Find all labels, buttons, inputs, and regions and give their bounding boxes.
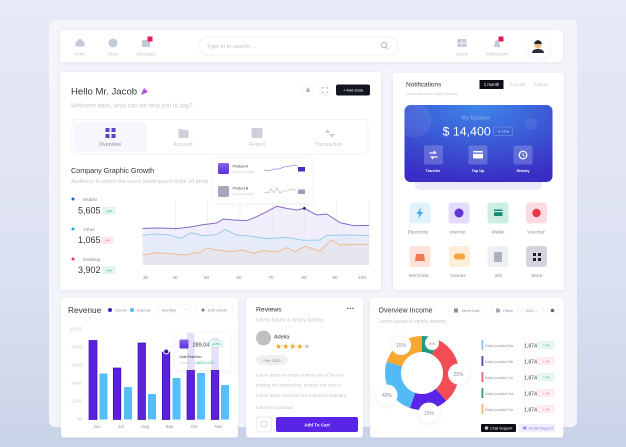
stat: desktop: Desktop [83, 257, 101, 263]
tab: transaction [315, 129, 342, 148]
area line chart [143, 200, 369, 281]
search box [199, 37, 398, 55]
data tooltip: +8.5% [212, 342, 221, 346]
legend: Income [115, 308, 127, 312]
button: email support: Email Support [529, 426, 554, 430]
stat: other: -3% [104, 238, 110, 242]
bar chart: 4,000 [72, 380, 83, 386]
legend: product ee [482, 404, 554, 414]
dashboard frame [49, 20, 577, 427]
date pill: Feb 2020 [264, 358, 281, 363]
tab bar [72, 120, 368, 154]
button: add data: + Add Data [343, 88, 364, 92]
stat: other: 1,065 [78, 235, 101, 245]
legend: product bb: ↙ 2% [542, 360, 550, 364]
action: top up [468, 146, 488, 173]
service: games [449, 246, 470, 279]
service: more: More [532, 273, 543, 279]
heading: revenue: Revenue [68, 305, 102, 315]
period selector: Custom [534, 82, 549, 87]
heading: company growth: Company Graphic Growth [71, 166, 154, 175]
bar chart: Sep [165, 424, 174, 429]
bar chart: Nov [214, 424, 223, 429]
bar chart: 10,000 [69, 326, 83, 332]
bubble: 40%: 40% [382, 393, 393, 399]
area line chart: 30 [143, 275, 148, 281]
bubble: 15% top: 15% [396, 343, 407, 349]
service: bill [488, 246, 508, 279]
tab: overview [74, 122, 147, 152]
stat: other: Other [83, 227, 95, 233]
service: merchant: Merchant [408, 273, 429, 279]
service: voucher [526, 202, 547, 236]
tooltip: products [213, 158, 312, 203]
nav: layout: Layout [456, 52, 469, 56]
stat: desktop: +8% [106, 268, 112, 272]
service: bill: Bill [495, 273, 502, 279]
tab: account: Account [173, 142, 193, 148]
subtitle: Welcome back, what can we help you to day? [71, 104, 193, 110]
control: year: 2020 ⌄ [526, 309, 538, 313]
control: filters: Filters [503, 309, 513, 313]
legend: product ee: ↙ 2% [542, 408, 550, 412]
control: edit charts: Edit charts [208, 308, 227, 312]
nav: messages [136, 36, 156, 56]
bar chart: 8,000 [72, 344, 83, 350]
search box: Type in to search ... [207, 44, 256, 50]
area line chart: 40 [172, 275, 178, 281]
bar chart [69, 326, 232, 429]
bar chart: 2,000 [72, 398, 83, 404]
data tooltip: Data Retention [180, 355, 202, 359]
star rating: ★★★★★ [275, 342, 310, 351]
data tooltip: 289,04 [192, 342, 209, 348]
overview subtitle: Lorem Ipsum is simply dummy [378, 319, 447, 325]
nav: messages: Messages [136, 52, 156, 56]
period selector: 1 month [484, 82, 500, 87]
nav: chart: Chart [108, 52, 119, 56]
heading: hello: Hello Mr. Jacob [71, 86, 137, 98]
legend: product aa: Data product Aa [485, 343, 514, 348]
area line chart: 100 [358, 275, 366, 281]
review text: Lorem Ipsum is simply dummy text of the rice [256, 372, 345, 378]
legend: product cc: 1,874 [524, 376, 537, 382]
nav: notifications [486, 36, 508, 56]
heading: overview income: Overview Income [378, 308, 433, 314]
nav: home: Home [74, 52, 86, 56]
bar chart: Oct [190, 424, 198, 429]
bar chart: $0 [77, 416, 83, 422]
action: history [514, 146, 532, 173]
area line chart: 60 [236, 275, 242, 281]
legend: product bb [482, 356, 554, 366]
button: chat support: Chat Support [490, 426, 513, 430]
legend: product dd: ↙ 2% [542, 392, 550, 396]
bar chart: 6,000 [72, 362, 83, 368]
area line chart: 80 [301, 275, 307, 281]
product a [218, 163, 305, 174]
action: transfer: Transfer [426, 169, 441, 173]
nav: chart [108, 38, 119, 56]
profile avatar [526, 34, 550, 58]
nav: layout [456, 39, 469, 56]
reviewer name: Adelia [274, 334, 290, 340]
stat: other [72, 227, 113, 245]
period selector [480, 80, 549, 89]
legend: Expense [137, 308, 151, 312]
control: monthly: Monthly [162, 308, 176, 312]
tab: report: Report [249, 142, 265, 148]
bar chart: Jun [93, 424, 101, 429]
legend: product bb: Data product Bb [485, 359, 513, 364]
button: email support [519, 424, 555, 432]
panel: revenue [61, 298, 238, 438]
reviews subtitle: Lorem Ipsum is simply dummy [256, 318, 324, 324]
data tooltip [175, 333, 230, 370]
chart subtitle: Audience to which the users lorem ipsum dolor sit amet [71, 179, 209, 185]
service: internet [448, 202, 470, 236]
stat: mobile: +8% [106, 209, 112, 213]
action: transfer [424, 146, 443, 173]
balance amount: $ 14,400 [442, 124, 491, 138]
balance card [404, 105, 552, 190]
bar chart: Jul [118, 424, 124, 429]
control: year [522, 305, 543, 316]
tab: account [173, 129, 193, 148]
control: select date: Select Date [461, 309, 480, 313]
period selector: 6 month [510, 82, 526, 87]
service: electricity: Electricity [408, 230, 429, 236]
control: select date [449, 305, 486, 316]
legend: product cc: ↗ 3% [542, 376, 550, 380]
icon: more menu: ··· [346, 304, 354, 313]
review text: printing and typesetting. dummy text ever si [256, 382, 341, 388]
stat: mobile [72, 197, 115, 216]
panel: overview income [370, 298, 564, 438]
bubble: 5%: 5% [429, 341, 435, 346]
product b [218, 186, 305, 197]
service: electricity [408, 202, 430, 236]
action: history: History [516, 169, 530, 173]
area line chart: 50 [204, 275, 209, 281]
service: wallet [488, 202, 508, 236]
reviewer avatar [256, 330, 271, 346]
icon: bell button [302, 84, 314, 96]
action: top up: Top Up [472, 169, 485, 173]
legend [108, 308, 151, 312]
stat: mobile: Mobile [83, 197, 97, 203]
review text: Industry's standard [256, 405, 294, 410]
legend: product dd [482, 388, 554, 398]
data tooltip: 1,84526 USD [194, 361, 214, 365]
heading: reviews: Reviews [256, 306, 282, 314]
tab: report [249, 128, 265, 148]
button: chat support [481, 424, 516, 432]
legend: product ee: 1,874 [524, 408, 537, 414]
legend: product dd: Data product Dd [485, 391, 513, 396]
panel: greeting and growth [60, 72, 381, 290]
notifications subtitle: Lorem Ipsum is simply dummy [406, 92, 457, 96]
service: internet: Internet [449, 230, 466, 236]
legend: product aa: ↗ 3% [542, 344, 550, 348]
button: add data [336, 84, 370, 96]
data tooltip: Amount [180, 361, 191, 365]
service: more [526, 246, 547, 279]
icon: party popper [141, 88, 148, 95]
bubble: 15% bottom: 15% [424, 411, 435, 417]
label: my balance: My Balance [462, 116, 490, 122]
area line chart: 90 [332, 275, 338, 281]
tab: overview: Overview [99, 142, 121, 148]
product a: Product A [232, 164, 249, 168]
legend: product aa: 1,874 [524, 344, 537, 350]
panel: notifications [393, 73, 564, 290]
legend: product cc [482, 372, 554, 382]
panel: reviews [246, 298, 363, 438]
balance change badge: ↗ 27% [497, 130, 510, 134]
button: chat [256, 417, 271, 432]
stat: mobile: 5,605 [78, 206, 101, 216]
product b: Product B [232, 186, 249, 190]
legend: product aa [482, 340, 554, 350]
service: merchant [408, 246, 430, 279]
top navigation bar [60, 30, 563, 62]
icon: expand button [320, 84, 330, 96]
nav: notifications: Notifications [486, 52, 508, 56]
control: filters [491, 305, 518, 316]
legend: product dd: 1,874 [524, 392, 537, 398]
service: voucher: Voucher [527, 230, 545, 236]
control: monthly [158, 305, 191, 315]
legend: product bb: 1,874 [524, 360, 537, 366]
area line chart: 70 [268, 275, 274, 281]
stat: desktop: 3,902 [78, 265, 101, 275]
button: add to cart: Add To Cart [304, 422, 330, 428]
control: settings [547, 305, 558, 316]
review text: Lorem Ipsum has been the industry's standard [256, 393, 347, 398]
product b: 25 Januari 2022 [232, 192, 254, 196]
heading: notifications: Notifications [406, 82, 442, 88]
control: edit charts [197, 305, 233, 315]
bar chart: Aug [141, 424, 149, 429]
stat: desktop [72, 257, 115, 275]
legend: product cc: Data product Cc [485, 375, 513, 380]
product a: 25 Januari 2022 [232, 170, 254, 174]
balance change badge [494, 127, 512, 136]
service: games: Games [450, 273, 466, 279]
service: wallet: Wallet [491, 230, 505, 236]
nav: home [74, 38, 86, 56]
bubble: 25%: 25% [453, 372, 464, 378]
donut chart [376, 335, 469, 424]
legend: product ee: Data product Ee [485, 407, 513, 412]
tab: transaction: Transaction [315, 142, 342, 148]
control: monthly: ⌃ [184, 308, 188, 312]
